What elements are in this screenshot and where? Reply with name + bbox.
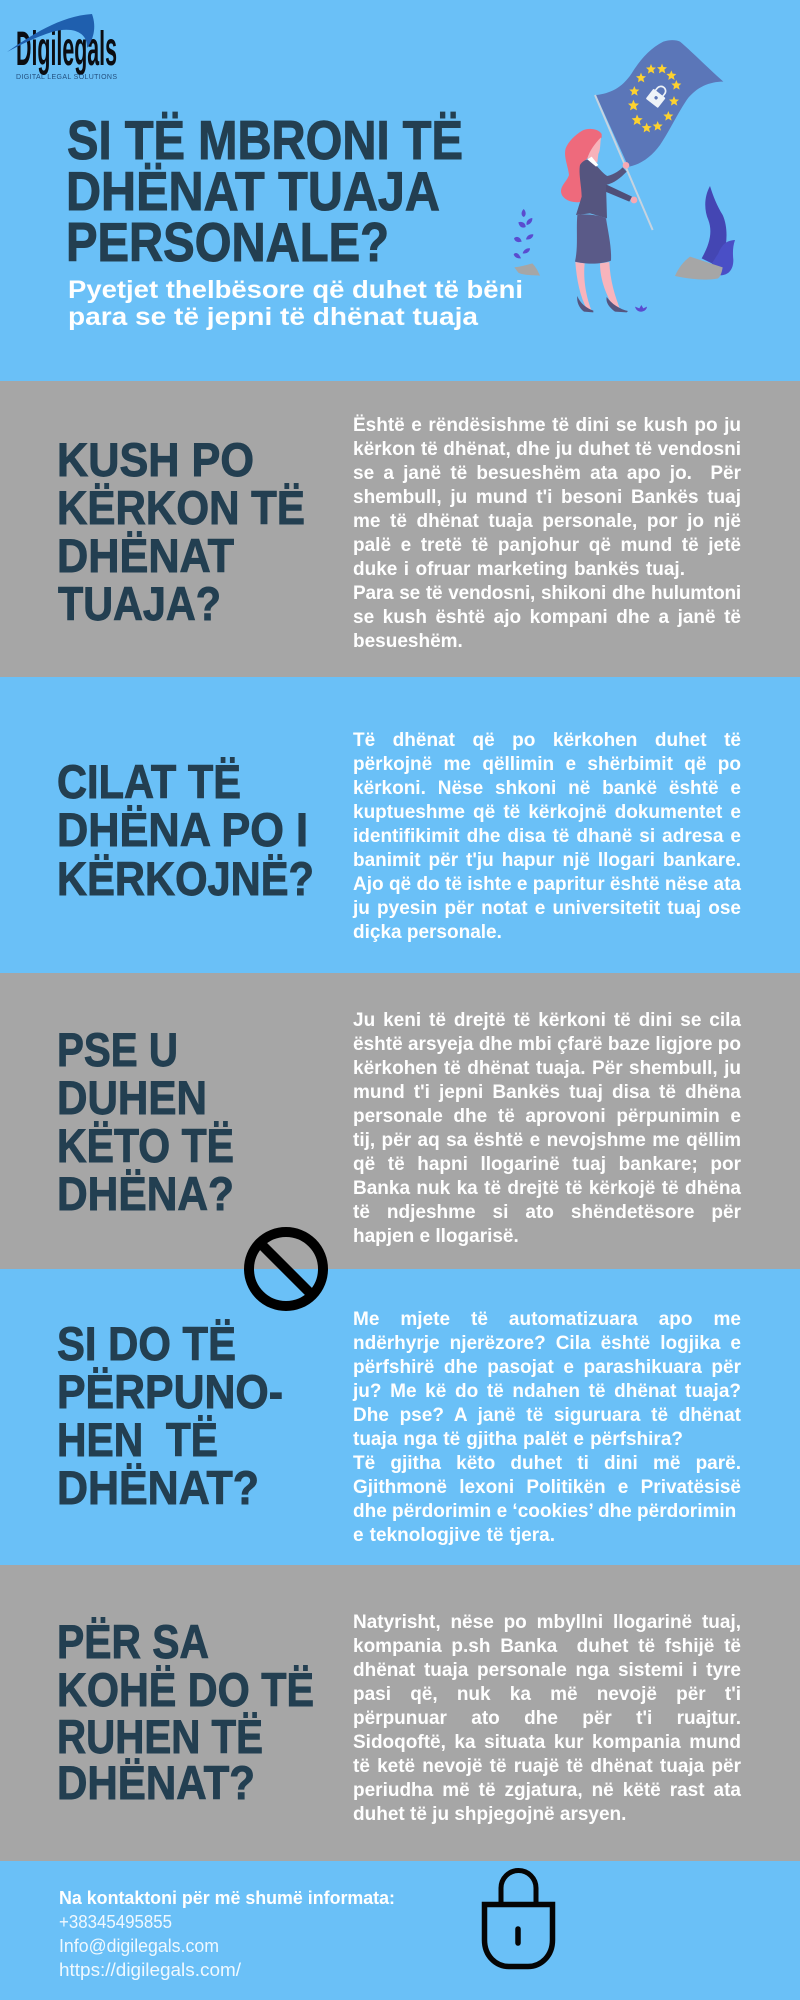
heading: KËTO TË <box>57 1119 234 1172</box>
text block: se a janë të besueshëm ata apo jo. Për <box>353 463 741 484</box>
logo: Digilegals: DIGITAL LEGAL SOLUTIONS <box>16 74 117 81</box>
heading: PËR SA <box>57 1615 209 1668</box>
text block: pasi që, nuk ka më nevojë për t'i <box>353 1684 741 1705</box>
heading: HEN TË <box>57 1413 218 1466</box>
text block: duhet të ju shpjegojnë arsyen. <box>353 1804 626 1825</box>
heading: DHËNAT? <box>57 1461 259 1513</box>
contact details: Info@digilegals.com <box>59 1936 219 1956</box>
text block: dhe përdorimin e ‘cookies’ dhe përdorimin <box>353 1501 736 1522</box>
text block: Banka nuk ka të drejtë të kërkojë të dhëna <box>353 1178 741 1199</box>
text block: kompania p.sh Banka duhet të fshijë të <box>353 1636 741 1657</box>
text block <box>352 1309 741 1546</box>
subtitle: Pyetjet thelbësore që duhet të bëni <box>68 276 523 304</box>
text block: ju pyesin për notat e universitetit tuaj ose <box>353 898 741 919</box>
text block: palë e tretë të panjohur që mund të jetë <box>353 535 741 556</box>
heading: PËRPUNO- <box>57 1365 283 1418</box>
icon: flag <box>596 40 723 167</box>
title <box>66 109 463 270</box>
panel: why needed <box>0 973 800 1269</box>
panel: what data <box>0 677 800 973</box>
heading <box>57 1615 314 1809</box>
footer panel <box>0 1861 800 2000</box>
icon: padlock <box>482 1868 556 1970</box>
heading: DHËNA? <box>57 1167 234 1220</box>
icon: prohibition sign <box>244 1227 328 1311</box>
text block: që të hapni llogarinë tuaj bankare; por <box>353 1154 741 1175</box>
text block: Para se të vendosni, shikoni dhe hulumtoni <box>353 583 741 604</box>
icon: right plant <box>702 186 735 275</box>
heading <box>57 755 314 905</box>
text block: personale dhe të aprovoni përpunimin e <box>353 1106 741 1127</box>
text block: Sidoqoftë, ka situata kur kompania mund <box>353 1732 741 1753</box>
text block: Dhe pse? A janë të siguruara të dhënat <box>353 1405 741 1426</box>
text block: banimit për t'ju hapur një llogari bankare. <box>353 850 741 871</box>
text block: se kush është ajo kompani dhe a janë të <box>353 607 741 628</box>
text block <box>353 414 741 652</box>
heading <box>57 1317 283 1513</box>
contact details: +38345495855 <box>59 1912 172 1932</box>
title: DHËNAT TUAJA <box>66 160 440 222</box>
heading <box>57 1025 234 1220</box>
subtitle: para se të jepni të dhënat tuaja <box>68 303 479 331</box>
text block: duke i ofruar marketing bankës tuaj. <box>353 559 685 580</box>
text block: Gjithmonë lexoni Politikën e Privatësisë <box>353 1477 741 1498</box>
heading: CILAT TË <box>57 755 241 808</box>
text block: përfshirë dhe pasojat e parashikuara për <box>353 1357 741 1378</box>
text block: Ajo që do të ishte e papritur është nëse ata <box>353 874 741 895</box>
text block: hapjen e llogarisë. <box>353 1226 519 1247</box>
icon: flag pole <box>595 95 653 230</box>
panel: who is asking <box>0 381 800 677</box>
text block <box>353 1612 742 1825</box>
contact details: Na kontaktoni për më shumë informata: <box>59 1888 395 1908</box>
text block: me të dhënat tuaja personale, por jo një <box>353 511 741 532</box>
text block: mund t'i jepni Bankës tuaj disa të dhëna <box>353 1082 741 1103</box>
heading: DHËNAT <box>57 529 234 582</box>
text block: Ju keni të drejtë të kërkoni të dini se cila <box>353 1010 741 1031</box>
text block: Të gjitha këto duhet ti dini më parë. <box>353 1453 741 1474</box>
text block: Natyrisht, nëse po mbyllni llogarinë tuaj, <box>353 1612 741 1633</box>
heading: TUAJA? <box>58 577 221 630</box>
text block: Të dhënat që po kërkohen duhet të <box>353 730 741 751</box>
text block: e teknologjive të tjera. <box>353 1525 555 1546</box>
text block: të ndjeshme si ato shëndetësore për <box>353 1202 741 1223</box>
text block: ju? Me kë do të ndahen të dhënat tuaja? <box>353 1381 741 1402</box>
icon: right rock <box>675 257 723 280</box>
panel: how processed <box>0 1269 800 1565</box>
heading: DUHEN <box>57 1071 207 1124</box>
panel: how long stored <box>0 1565 800 1861</box>
text block: kërkon të dhënat, dhe ju duhet të vendosni <box>353 439 741 460</box>
header panel <box>0 0 800 381</box>
text block: besueshëm. <box>353 631 463 652</box>
text block: diçka personale. <box>353 922 502 943</box>
text block: identifikimit dhe disa të dhanë si adresa e <box>353 826 741 847</box>
icon: left rock <box>514 263 540 276</box>
subtitle <box>68 276 523 331</box>
text block: dhënat tuaja personale nga sistemi i tyre <box>353 1660 741 1681</box>
text block: tuaja nga të gjitha palët e përfshira? <box>353 1429 683 1450</box>
text block: tij, për aq sa është e nevojshme me qëllim <box>353 1130 741 1151</box>
text block: kuptueshme që të kërkojnë dokumentet e <box>353 802 741 823</box>
text block: kërkohen të dhënat tuaja. Për shembull, ju <box>353 1058 741 1079</box>
text block <box>353 1010 742 1247</box>
heading: DHËNAT? <box>57 1756 255 1809</box>
contact details: https://digilegals.com/ <box>59 1960 241 1980</box>
text block: përpunuar ato dhe për t'i ruajtur. <box>353 1708 741 1729</box>
heading: SI DO TË <box>57 1317 236 1370</box>
text block: shembull, ju mund t'i besoni Bankës tuaj <box>353 487 741 508</box>
text block: periudha më të zgjatura, në këtë rast ata <box>353 1780 741 1801</box>
heading <box>57 435 305 630</box>
icon: woman <box>561 129 637 312</box>
logo: Digilegals <box>8 14 117 81</box>
text block: Është e rëndësishme të dini se kush po ju <box>353 415 741 436</box>
text block: të ketë nevojë të ruajë të dhënat tuaja për <box>353 1756 741 1777</box>
text block: Me mjete të automatizuara apo me <box>353 1309 741 1330</box>
contact details <box>59 1888 395 1980</box>
text block: përkojnë me qëllimin e shërbimit që po <box>353 754 741 775</box>
text block <box>352 730 742 943</box>
icon: left plant <box>514 209 533 258</box>
text block: ndërhyrje njerëzore? Cila është logjika e <box>353 1333 741 1354</box>
icon: sprout <box>635 305 647 312</box>
heading: RUHEN TË <box>57 1710 263 1763</box>
text block: kërkoni. Nëse shkoni në bankë është e <box>353 778 741 799</box>
text block: është arsyeja dhe mbi çfarë baze ligjore po <box>353 1034 741 1055</box>
illustration: woman holding EU flag with padlock <box>514 40 735 312</box>
